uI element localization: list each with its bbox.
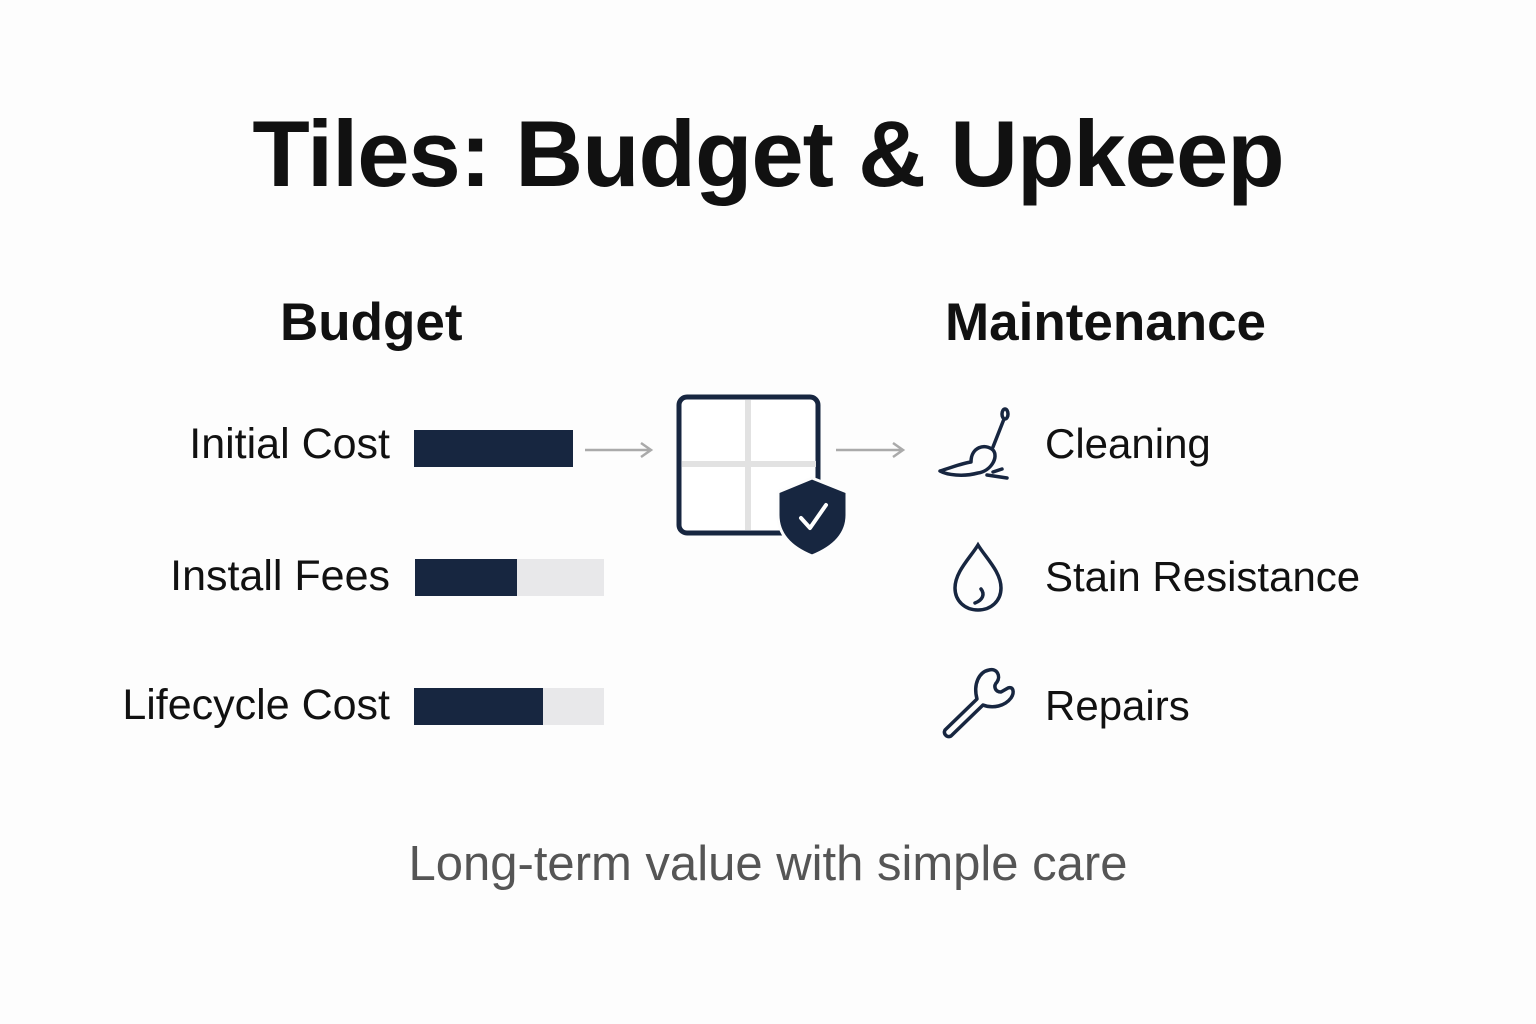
- label: stain resistance: Stain Resistance: [1045, 553, 1360, 600]
- bar: initial cost: [414, 430, 573, 467]
- label: cleaning: Cleaning: [1045, 420, 1211, 467]
- icon: shield check: [778, 478, 847, 556]
- center graphic: tile with arrows and shield: [585, 394, 905, 554]
- label: repairs: Repairs: [1045, 682, 1190, 729]
- footer tagline: Long-term value with simple care: [408, 837, 1127, 891]
- label: install fees: Install Fees: [170, 552, 390, 600]
- label: initial cost: Initial Cost: [189, 420, 390, 468]
- title: Tiles: Budget & Upkeep: [252, 101, 1284, 206]
- bar: lifecycle cost: [414, 688, 604, 725]
- icon: wrench: [942, 668, 1015, 738]
- icon: tile: [679, 397, 818, 533]
- label: lifecycle cost: Lifecycle Cost: [122, 681, 390, 729]
- heading: budget: Budget: [280, 293, 463, 352]
- icon: cleaning broom: [938, 407, 1010, 480]
- icon: water drop: [953, 542, 1003, 612]
- heading: maintenance: Maintenance: [945, 293, 1266, 352]
- bar: install fees: [415, 559, 604, 596]
- arrow: left: [585, 443, 651, 457]
- arrow: right: [836, 443, 903, 457]
